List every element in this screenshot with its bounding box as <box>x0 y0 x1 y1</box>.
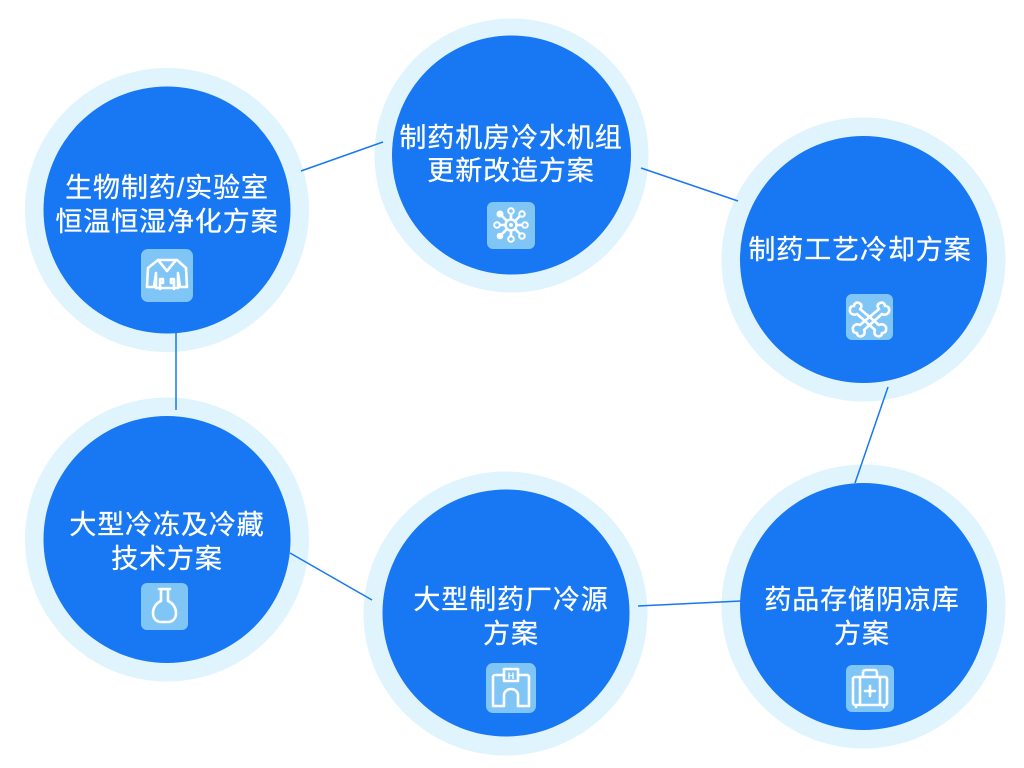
connector: chiller to process cooling <box>641 168 738 201</box>
label: large cold storage: 大型冷冻及冷藏 <box>69 510 265 540</box>
icon: hospital <box>486 663 536 713</box>
outer ring: biopharma <box>25 68 309 352</box>
node: chiller renovation <box>392 36 631 274</box>
label: plant cold source <box>413 585 609 649</box>
icon: lab coat <box>141 249 193 302</box>
label: plant cold source: 大型制药厂冷源 <box>413 585 609 615</box>
connector: plant to cold storage <box>290 553 372 600</box>
label: plant cold source: 方案 <box>483 619 539 649</box>
outer ring: chiller renovation <box>374 18 648 292</box>
connector: biopharma to chiller <box>301 142 383 171</box>
node: plant cold source <box>382 490 630 736</box>
connector: drug storage to plant <box>638 601 741 606</box>
outer ring: large cold storage <box>25 398 309 682</box>
label: drug cool storage: 药品存储阴凉库 <box>764 585 960 615</box>
outer ring: process cooling <box>722 118 1006 402</box>
label: chiller renovation: 更新改造方案 <box>427 156 595 186</box>
label: biopharma HVAC: 恒温恒湿净化方案 <box>55 207 279 237</box>
label: drug cool storage: 方案 <box>834 619 890 649</box>
node: large cold storage <box>44 416 290 663</box>
icon: crossed bones <box>846 294 893 340</box>
node: biopharma HVAC <box>44 86 290 334</box>
connector: cold storage to biopharma <box>175 304 177 410</box>
outer ring: drug cool storage <box>722 464 1006 748</box>
icon: network hub <box>487 202 535 249</box>
node: drug cool storage <box>740 483 987 730</box>
icon: flask <box>141 583 188 630</box>
icon: medical case <box>846 665 894 712</box>
icon: hospital: H <box>508 671 514 681</box>
node: process cooling <box>740 136 987 383</box>
label: chiller renovation <box>399 123 623 186</box>
label: large cold storage <box>69 510 265 574</box>
outer ring: plant cold source <box>364 472 648 756</box>
label: chiller renovation: 制药机房冷水机组 <box>399 123 623 153</box>
label: large cold storage: 技术方案 <box>111 544 223 574</box>
connector: process cooling to drug storage <box>855 387 888 483</box>
label: biopharma HVAC <box>55 173 279 237</box>
label: drug cool storage <box>764 585 960 649</box>
label: biopharma HVAC: 生物制药/实验室 <box>65 173 269 203</box>
label: process cooling: 制药工艺冷却方案 <box>748 235 972 265</box>
